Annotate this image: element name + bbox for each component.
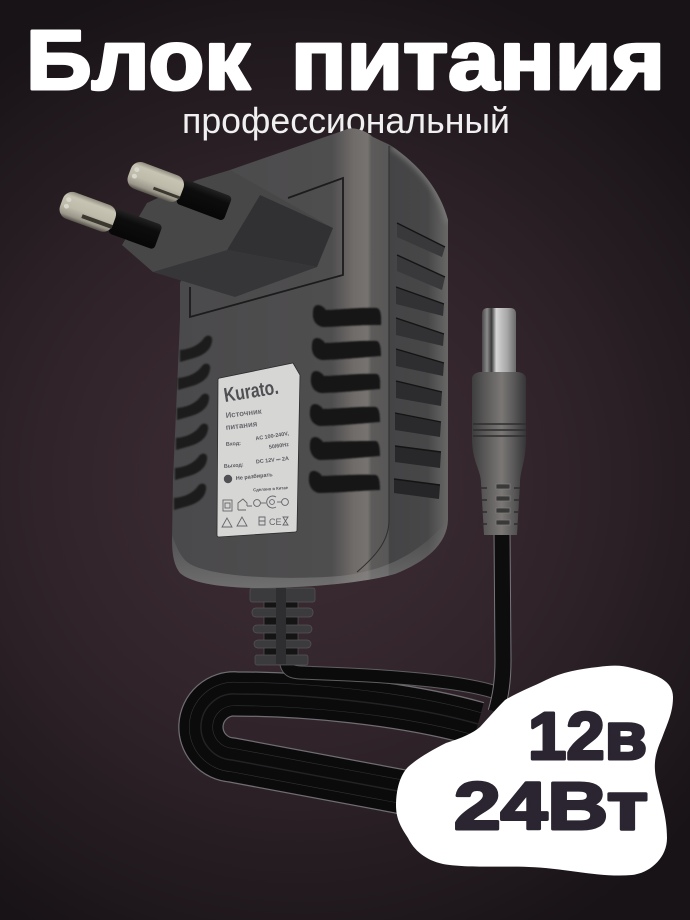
warning text: Не разбирать [235,471,274,482]
label card [217,363,300,537]
rear pin metal [125,159,187,205]
cable [201,530,503,797]
plug top facet [230,170,333,228]
seam line [357,146,389,572]
label input: Вход: [226,441,241,448]
connector metal tip [482,308,516,372]
label title: Источник [225,407,262,420]
shoulder highlight [392,146,449,222]
blob shape [396,666,673,876]
connector sleeve [472,372,526,535]
label output: Выход: [224,462,244,470]
plug side face [227,195,333,267]
strain relief [250,588,315,665]
subtitle: профессиональный [182,100,510,141]
label brand: Kurato. [222,377,280,407]
product label [217,363,300,537]
rear pin [125,159,233,222]
plug block [122,170,333,297]
front pin [57,189,163,251]
title: Блок [26,13,251,107]
power adapter body [57,128,449,588]
front pin tip highlights [63,196,72,209]
label input frequency: 50/60Hz [269,442,290,451]
certification icons [222,496,288,527]
right vent dark edges [394,223,445,485]
middle vents [309,305,381,493]
vertical cable [496,530,503,712]
front recess [190,178,343,317]
front pin stripe [81,214,113,229]
plug lower face [153,250,317,297]
right side vents [394,223,445,499]
connector [472,308,526,535]
title: питания [291,13,665,107]
rear pin stripe [153,187,180,199]
body shell [172,128,448,588]
title [26,13,665,107]
front pin insulator [108,209,163,250]
voltage: 12в [528,699,647,774]
cable loop [201,662,500,797]
plug front face [122,170,260,272]
origin text: Сделано в Китае [253,485,289,492]
front pin metal [57,189,119,235]
rear pin tip highlights [131,166,140,179]
body bottom rim [172,520,448,588]
left vents [174,336,212,510]
CE mark: CE [269,517,282,527]
warning badge [224,475,232,483]
vertical cable core [496,530,503,712]
specs badge [396,666,673,876]
wattage: 24Вт [454,769,648,844]
label input value: AC 100-240V, [255,431,290,442]
label output value: DC 12V ⎓ 2A [256,456,289,465]
label title second line: питания [225,419,258,432]
connector rings and grip [473,424,526,525]
rear pin insulator [176,179,232,221]
